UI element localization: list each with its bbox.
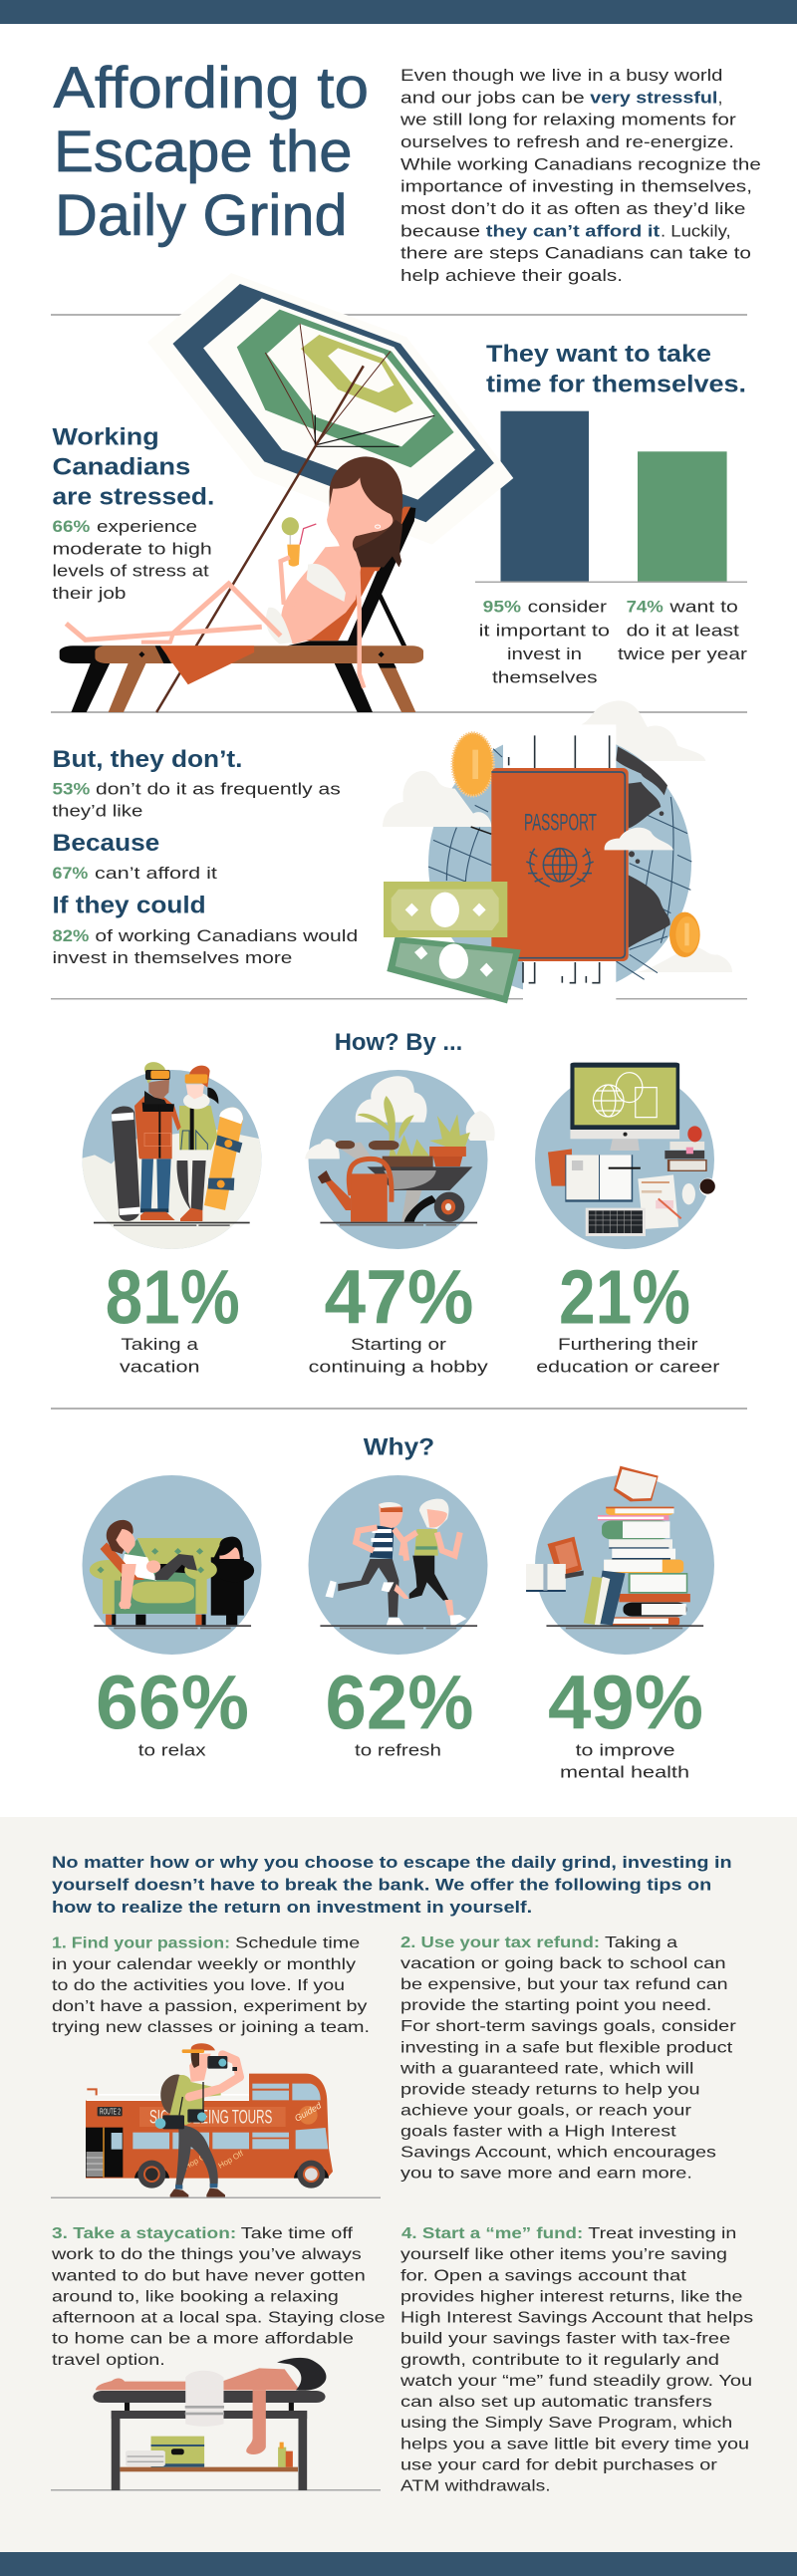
towel — [185, 2371, 223, 2427]
apple — [687, 1126, 702, 1142]
white cuts — [503, 727, 616, 769]
bikini and wrap — [307, 564, 346, 602]
title: Daily Grind — [55, 183, 347, 248]
stat: 66% stressed: experience — [97, 517, 197, 536]
bar chart — [475, 411, 747, 583]
tip 2: provide the starting point you need. — [400, 1997, 711, 2014]
stat: 81%: vacation — [120, 1357, 199, 1376]
bar caption: 74%: do it at least — [627, 621, 739, 640]
drink and straw — [282, 517, 316, 567]
intro paragraph: they can’t afford it — [486, 221, 661, 240]
tip 1: 1. Find your passion: — [52, 1935, 230, 1952]
title: Affording to — [54, 56, 369, 121]
stat: 49% mental health — [548, 1661, 703, 1782]
heading: working canadians are stressed: are stressed. — [52, 484, 214, 511]
intro paragraph: because — [400, 221, 480, 240]
open notebook — [565, 1155, 633, 1202]
ground — [546, 1625, 703, 1627]
stat: 81% — [106, 1254, 240, 1376]
illustration: tour bus and tourist: ROUTE 2 — [100, 2107, 121, 2116]
section: because — [52, 830, 217, 883]
tip 3: work to do the things you’ve always — [51, 2246, 362, 2263]
bus body — [86, 2074, 333, 2179]
tip 2: investing in a safe but flexible product — [400, 2039, 733, 2056]
heading: they want to take time: time for themselves. — [486, 371, 746, 397]
stat: 49% mental health: 49% — [548, 1661, 703, 1746]
ground — [94, 1222, 250, 1223]
plants — [384, 1096, 396, 1143]
tip 4: provides higher interest returns, like the — [400, 2288, 743, 2305]
bar caption: 95%: consider — [528, 597, 607, 616]
tip 3: around to, like booking a relaxing — [52, 2288, 339, 2305]
bar caption: 74%: want to — [668, 597, 738, 616]
bottom bar — [0, 2552, 797, 2576]
woman runner — [419, 1499, 449, 1529]
tip 2: goals faster with a High Interest — [400, 2124, 676, 2140]
illustration: tour bus and tourist: Guided — [293, 2100, 324, 2124]
book stack — [669, 1142, 704, 1150]
left snowboard — [112, 1106, 140, 1221]
stat: 47% — [309, 1254, 488, 1376]
tips intro — [52, 1853, 732, 1917]
stat: 21%: 21% — [559, 1254, 690, 1340]
stat: 49% mental health: mental health — [560, 1763, 689, 1782]
intro paragraph: , — [718, 88, 722, 107]
passport — [491, 768, 629, 961]
man runner — [370, 1526, 394, 1559]
woman on sofa — [101, 1542, 144, 1580]
illustration: passport, globe, coins and money — [379, 700, 732, 1011]
stat: 21%: Furthering their — [558, 1335, 698, 1354]
hair — [330, 456, 402, 567]
tip 4: build your savings faster with tax-free — [400, 2331, 730, 2348]
tip 3: travel option. — [52, 2352, 165, 2369]
tip 4: yourself like other items you’re saving — [400, 2246, 727, 2263]
icon: stack of books — [526, 1466, 714, 1655]
left books — [547, 1537, 582, 1577]
section: but they don't — [52, 746, 341, 821]
tips intro: yourself doesn’t have to break the bank. We offer the following tips on — [52, 1876, 711, 1895]
illustration: tour bus and tourist: Hop Off — [217, 2149, 245, 2171]
tourist — [160, 2074, 181, 2114]
section: if they could: If they could — [52, 893, 206, 919]
table — [112, 2411, 307, 2419]
heading: working canadians are stressed: Working — [52, 424, 159, 451]
intro paragraph: there are steps Canadians can take to — [400, 244, 751, 263]
continents — [616, 746, 670, 948]
heading: they want to take time — [486, 341, 746, 397]
illustration: tour bus and tourist — [51, 2043, 381, 2198]
tips intro: No matter how or why you choose to escape the daily grind, investing in — [52, 1853, 732, 1872]
ground — [320, 1222, 477, 1223]
stat: 62% refresh: 62% — [325, 1661, 474, 1746]
icon: gardening — [305, 1070, 495, 1249]
skin — [281, 477, 393, 644]
tip 1 — [52, 1935, 370, 2036]
pencil — [659, 1198, 681, 1218]
illustration: massage table — [51, 2358, 381, 2490]
pad — [93, 2391, 326, 2403]
tip 4: for. Open a savings account that — [400, 2267, 686, 2284]
flying book — [614, 1466, 659, 1501]
door and stairs — [86, 2128, 123, 2178]
bar caption: 74%: 74% — [627, 597, 664, 616]
stat: 81%: Taking a — [121, 1335, 199, 1354]
bar caption: 95%: themselves — [492, 668, 598, 687]
tip 1: don’t have a passion, experiment by — [52, 1998, 367, 2015]
section: but they don't: 53% — [52, 779, 90, 798]
tip 2: achieve your goals, or reach your — [400, 2102, 692, 2120]
intro paragraph — [399, 66, 761, 285]
tip 4: growth, contribute to it regularly and — [400, 2352, 719, 2369]
stat: 47%: 47% — [325, 1254, 474, 1340]
tip 2: vacation or going back to school can — [400, 1955, 726, 1972]
paper — [638, 1174, 678, 1229]
intro paragraph: very stressful — [590, 88, 717, 107]
tip 2: For short-term savings goals, consider — [400, 2018, 737, 2035]
heading: working canadians are stressed — [52, 424, 214, 511]
green bill — [387, 936, 521, 1003]
section: because: can’t afford it — [95, 864, 217, 883]
bar caption: 95%: 95% — [483, 597, 521, 616]
intro paragraph: and our jobs can be — [400, 88, 585, 107]
hanging arm — [358, 566, 364, 688]
hair — [277, 2358, 326, 2391]
grid lines — [428, 749, 691, 979]
tip 1: trying new classes or joining a team. — [52, 2019, 370, 2036]
tip 4: ATM withdrawals. — [400, 2478, 551, 2495]
title: Escape the — [54, 120, 353, 184]
stat: 66% relax: 66% — [96, 1661, 249, 1746]
stat: 66% relax: to relax — [138, 1740, 206, 1759]
stat: 66% stressed: 66% — [52, 517, 90, 536]
tip 4: use your card for debit purchases or — [400, 2456, 718, 2474]
olive bill — [384, 882, 507, 937]
coffee — [699, 1178, 716, 1196]
stat: 21%: education or career — [536, 1357, 720, 1376]
stat: 62% refresh: to refresh — [355, 1740, 441, 1759]
tip 3: to home can be a more affordable — [52, 2331, 354, 2348]
soil box and tools — [383, 1157, 433, 1167]
watering can — [349, 1159, 392, 1202]
tip 3: wanted to do but have never gotten — [51, 2267, 366, 2284]
woman snowboarder — [207, 1088, 218, 1104]
tip 3: 3. Take a staycation: — [52, 2225, 236, 2242]
section: if they could — [52, 893, 358, 967]
tip 1: Schedule time — [235, 1935, 360, 1952]
tip 2: Taking a — [605, 1934, 677, 1951]
intro paragraph: importance of investing in themselves, — [400, 177, 752, 196]
tip 1: in your calendar weekly or monthly — [52, 1956, 356, 1973]
stat: 66% stressed: moderate to high — [52, 539, 212, 558]
bottles — [278, 2447, 286, 2467]
arm holding glass — [281, 557, 308, 605]
man snowboarder — [134, 1096, 181, 1159]
tips intro: how to realize the return on investment in yourself. — [52, 1898, 532, 1917]
stat: 66% stressed: levels of stress at — [52, 562, 209, 581]
orange book — [548, 1149, 572, 1186]
icon: relaxing on sofa — [82, 1475, 261, 1655]
heading: why: Why? — [364, 1434, 434, 1461]
bench — [60, 645, 166, 663]
passport label: PASSPORT — [524, 809, 597, 836]
monitor — [570, 1063, 679, 1131]
section: because: Because — [52, 830, 159, 857]
illustration: tour bus and tourist: SIGHTSEEING TOURS — [149, 2108, 272, 2129]
screen icons — [593, 1073, 657, 1118]
tip 2: Savings Account, which encourages — [400, 2145, 716, 2162]
heading: how: How? By ... — [335, 1029, 462, 1056]
sofa — [137, 1538, 234, 1571]
keyboard — [586, 1208, 646, 1236]
stat: 49% mental health: to improve — [576, 1740, 675, 1759]
tip 2: be expensive, but your tax refund can — [400, 1976, 728, 1993]
mouse — [682, 1183, 695, 1204]
body — [96, 2368, 300, 2391]
section: but they don't: But, they don’t. — [52, 746, 242, 773]
clouds — [356, 1076, 426, 1123]
barrow — [367, 1166, 472, 1190]
intro paragraph: While working Canadians recognize the — [400, 154, 761, 173]
heading: working canadians are stressed: Canadians — [52, 454, 190, 481]
title — [54, 56, 369, 248]
chair back — [346, 507, 415, 645]
tip 2: provide steady returns to help you — [400, 2081, 700, 2098]
tip 2: you to save more and earn more. — [400, 2166, 692, 2183]
tip 4: 4. Start a “me” fund: — [401, 2225, 583, 2242]
box and towels — [151, 2437, 204, 2467]
tip 4: using the Simply Save Program, which — [400, 2415, 732, 2432]
bar caption: 95%: it important to — [479, 621, 610, 640]
intro paragraph: . Luckily, — [661, 221, 731, 240]
diamonds — [97, 1548, 204, 1573]
ground — [320, 1625, 477, 1627]
section: because: 67% — [52, 864, 88, 883]
tip 2 — [399, 1934, 737, 2183]
intro paragraph: Even though we live in a busy world — [400, 66, 723, 85]
heading: they want to take time: They want to take — [486, 341, 711, 368]
bar caption: 74%: twice per year — [618, 644, 747, 663]
section: if they could: invest in themselves more — [52, 948, 292, 967]
top bar — [0, 0, 797, 24]
bar caption: 74% — [618, 597, 747, 663]
stat: 47%: Starting or — [351, 1335, 446, 1354]
clouds — [383, 700, 732, 972]
leaning books — [595, 1571, 626, 1626]
illustration: tour bus and tourist: Hop On — [183, 2150, 211, 2172]
section: but they don't: they’d like — [52, 802, 142, 821]
tip 3: afternoon at a local spa. Staying close — [52, 2309, 386, 2327]
illustration: woman lounging under umbrella — [60, 273, 513, 712]
tip 4: helps you a save little bit every time you — [400, 2436, 749, 2452]
bar caption: 95% — [479, 597, 610, 687]
tip 1: to do the activities you love. If you — [52, 1977, 345, 1994]
panel: tips — [0, 1817, 797, 2552]
wheels — [134, 2166, 169, 2179]
stack — [606, 1507, 674, 1515]
tip 2: 2. Use your tax refund: — [400, 1934, 600, 1951]
coin bottom — [669, 912, 700, 957]
intro paragraph: help achieve their goals. — [400, 266, 623, 285]
intro paragraph: we still long for relaxing moments for — [399, 111, 736, 129]
stat: 47%: continuing a hobby — [309, 1357, 488, 1376]
intro paragraph: ourselves to refresh and re-energize. — [400, 132, 734, 151]
bar caption: 95%: invest in — [507, 644, 582, 663]
pot — [429, 1147, 466, 1157]
tip 3: Take time off — [241, 2225, 354, 2242]
tip 4 — [399, 2225, 753, 2495]
stat: 66% stressed — [52, 517, 212, 603]
icon: desk with computer — [535, 1063, 716, 1249]
tip 4: watch your “me” fund steadily grow. You — [399, 2373, 752, 2390]
intro paragraph: most don’t do it as often as they’d like — [400, 199, 745, 218]
icon: joggers — [309, 1475, 488, 1655]
tip 4: Treat investing in — [588, 2225, 736, 2242]
coin top — [452, 733, 493, 796]
page ticks — [509, 735, 610, 983]
tip 4: High Interest Savings Account that helps — [400, 2309, 753, 2327]
stat: 66% stressed: their job — [52, 584, 126, 603]
stat: 81%: 81% — [106, 1254, 240, 1340]
stat: 21% — [536, 1254, 720, 1376]
tip 4: can also set up automatic transfers — [400, 2394, 712, 2411]
legs — [66, 624, 262, 640]
right snowboard — [204, 1108, 243, 1210]
icon: snowboarding couple — [82, 1062, 261, 1249]
ground — [94, 1625, 251, 1627]
tip 3 — [51, 2225, 386, 2369]
globe — [428, 732, 691, 995]
section: if they could: 82% — [52, 926, 89, 945]
section: but they don't: don’t do it as frequently as — [96, 779, 341, 798]
small cloud — [605, 828, 673, 850]
tip 2: with a guaranteed rate, which will — [399, 2060, 693, 2077]
section: if they could: of working Canadians would — [95, 926, 358, 945]
